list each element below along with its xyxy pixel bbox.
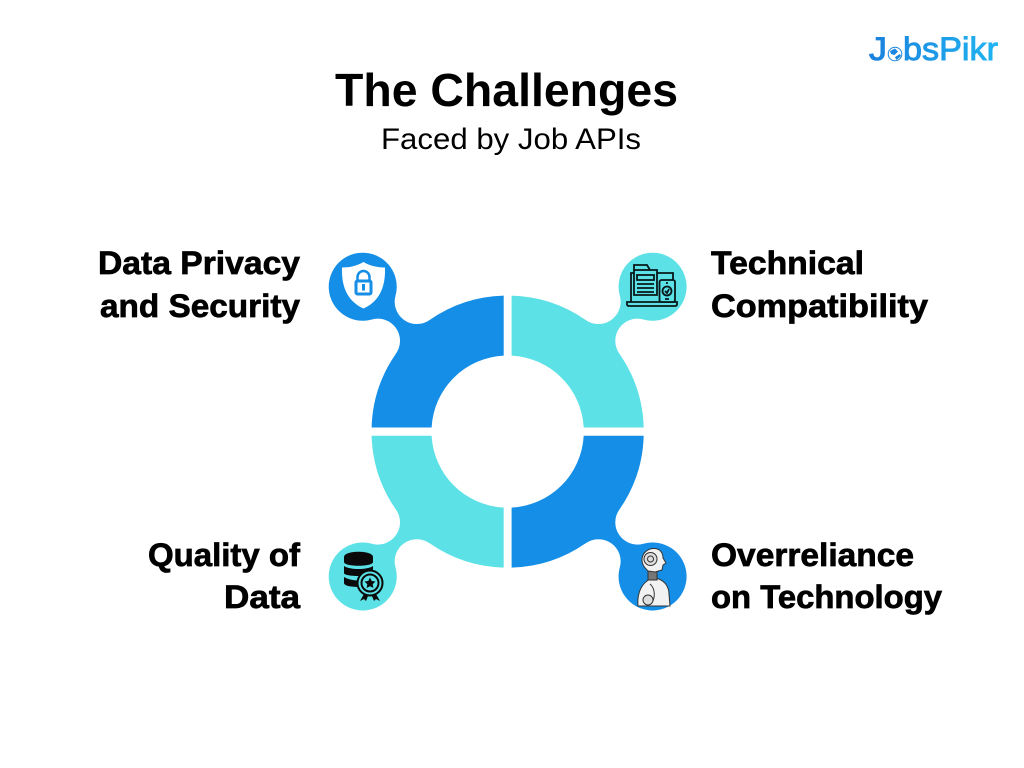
segment: technical compatibility (top right) [512, 253, 687, 428]
label: Data Privacy and Security: and Security [100, 288, 300, 324]
label: Overreliance on Technology: Overreliance [711, 537, 914, 573]
label: Quality of Data: Quality of [148, 537, 300, 573]
subtitle: Faced by Job APIs [381, 123, 641, 156]
title: The Challenges [335, 64, 678, 116]
icon: devices [627, 265, 677, 306]
label: Quality of Data [148, 537, 300, 615]
logo: JobsPikr: bsPikr [903, 31, 998, 67]
label: Overreliance on Technology: on Technology [711, 579, 942, 615]
label: Quality of Data: Data [224, 579, 300, 615]
icon: database with award [344, 552, 382, 601]
icon: robot [638, 548, 670, 606]
label: Technical Compatibility: Technical [711, 245, 864, 281]
label: Overreliance on Technology [711, 537, 942, 615]
segment: quality of data (bottom left) [329, 436, 504, 610]
icon: shield with lock [342, 262, 385, 308]
segment: overreliance on technology (bottom right) [512, 436, 687, 610]
label: Technical Compatibility [711, 245, 928, 324]
label: Data Privacy and Security: Data Privacy [98, 245, 300, 281]
segment: data privacy (top left) [329, 253, 504, 428]
logo: JobsPikr: o [889, 43, 902, 65]
logo: JobsPikr: J [869, 31, 887, 67]
label: Data Privacy and Security [98, 245, 300, 324]
label: Technical Compatibility: Compatibility [711, 288, 928, 324]
logo: JobsPikr [869, 31, 998, 67]
